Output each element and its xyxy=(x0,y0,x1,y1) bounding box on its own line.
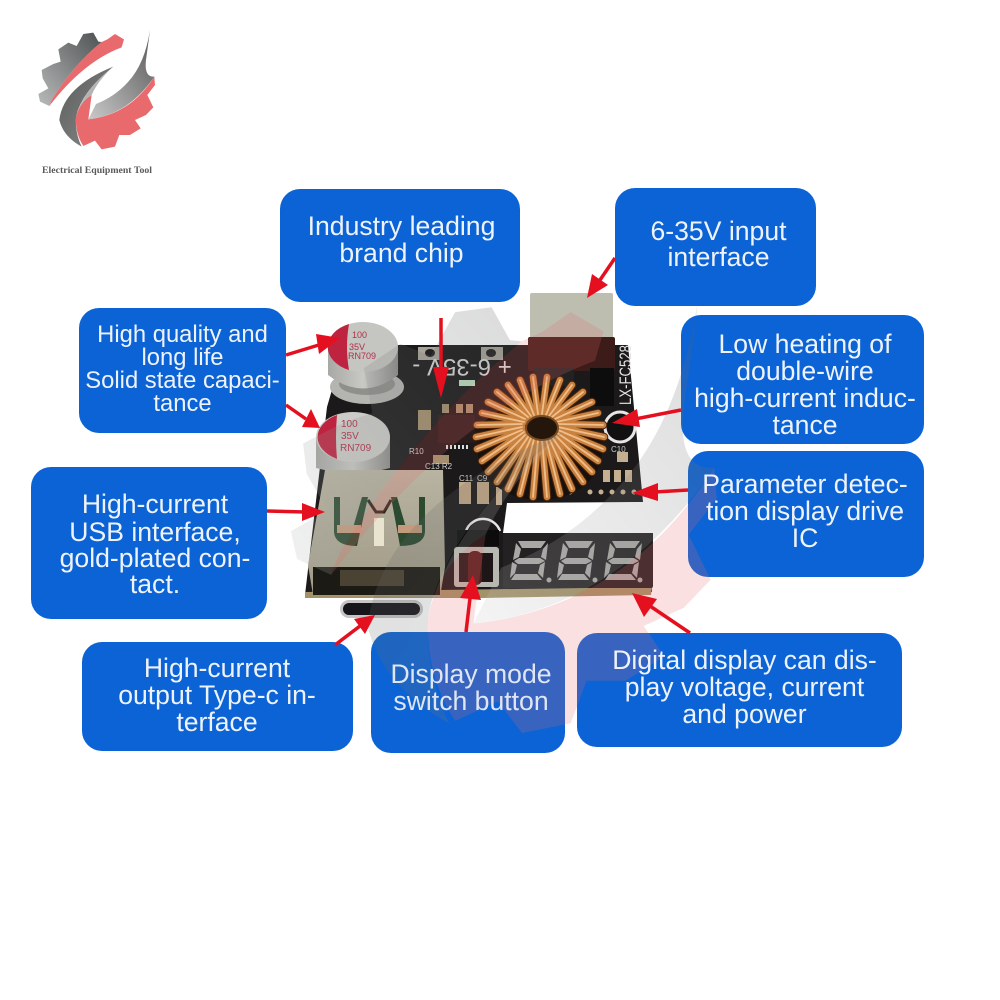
callout: usb interface: USB interface, xyxy=(69,517,241,547)
callout: display mode button: switch button xyxy=(393,686,549,716)
callout: digital display: play voltage, current xyxy=(625,672,865,702)
callout: input interface: interface xyxy=(668,242,770,272)
logo wordmark: Electrical Equipment Tool xyxy=(42,166,152,176)
arrows xyxy=(267,258,690,645)
arrow to display xyxy=(632,593,690,633)
callout: digital display: Digital display can dis- xyxy=(612,645,877,675)
callout: low heating inductance: tance xyxy=(772,410,838,440)
arrow to input connector xyxy=(587,258,615,298)
arrow to driver ic xyxy=(632,483,688,501)
capacitor 1 xyxy=(328,322,404,404)
logo gear mark xyxy=(38,30,155,149)
capacitor 2: 100 xyxy=(341,419,358,430)
capacitor 1: RN709 xyxy=(348,351,376,361)
header pads xyxy=(568,490,636,494)
callout: solid state capacitance: long life xyxy=(141,344,224,371)
silkscreen component labels: C11 xyxy=(459,474,474,483)
callout: low heating inductance: high-current induc- xyxy=(694,383,916,413)
arrow to inductor xyxy=(612,409,681,427)
silkscreen component labels: C9 xyxy=(477,474,488,483)
capacitor 2 xyxy=(316,412,390,473)
arrow to chip xyxy=(433,318,449,398)
callout: low heating inductance: double-wire xyxy=(736,356,874,386)
arrow to capacitor 2 xyxy=(286,405,320,428)
arrow to button xyxy=(460,575,481,632)
callout: usb interface: tact. xyxy=(130,569,180,599)
callout: parameter detection: Parameter detec- xyxy=(702,469,908,499)
callout: digital display: and power xyxy=(682,699,807,729)
digital display xyxy=(503,533,653,588)
silkscreen component labels: C10 xyxy=(611,445,626,454)
callout: type-c output: terface xyxy=(176,707,258,737)
toroid inductor xyxy=(476,377,604,500)
arrow to capacitor 1 xyxy=(286,334,340,355)
callout: type-c output: output Type-c in- xyxy=(118,680,316,710)
callout: display mode button: Display mode xyxy=(390,659,552,689)
callout: industry leading chip: brand chip xyxy=(339,238,464,268)
switch button xyxy=(454,519,500,587)
silkscreen component labels: C13 R2 xyxy=(425,462,453,471)
pcb xyxy=(305,345,653,595)
input type-c connector xyxy=(528,293,615,406)
silkscreen model label: LX-FC528 xyxy=(616,345,635,405)
pcb gold edge xyxy=(305,587,652,598)
silkscreen component labels: R10 xyxy=(409,447,424,456)
capacitor 2: 35V xyxy=(341,431,359,442)
mounting ring xyxy=(605,412,635,442)
callout: industry leading chip: Industry leading xyxy=(308,211,495,241)
callout: solid state capacitance: High quality and xyxy=(97,321,268,348)
callout: solid state capacitance: tance xyxy=(153,390,212,417)
silkscreen polarity label: + 6-35V - xyxy=(412,353,512,380)
output type-c port xyxy=(340,600,423,618)
capacitor 2: RN709 xyxy=(340,443,372,454)
smd components xyxy=(418,380,632,505)
capacitor 1: 100 xyxy=(352,330,367,340)
arrow to type-c port xyxy=(335,615,375,645)
callout: type-c output: High-current xyxy=(144,653,291,683)
callout: parameter detection: tion display drive xyxy=(706,496,904,526)
capacitor 1: 35V xyxy=(349,342,365,352)
callout: parameter detection: IC xyxy=(792,523,818,553)
product photo: converter board xyxy=(305,293,653,618)
top solder pads xyxy=(418,347,503,360)
callout: input interface: 6-35V input xyxy=(650,216,787,246)
watermark xyxy=(291,297,717,733)
callout boxes xyxy=(31,188,924,753)
silkscreen component labels xyxy=(409,445,626,483)
callout: usb interface: High-current xyxy=(82,489,229,519)
driver chip xyxy=(438,415,475,449)
callout: low heating inductance: Low heating of xyxy=(718,329,892,359)
usb connector xyxy=(308,470,445,597)
logo xyxy=(38,30,155,176)
callout: usb interface: gold-plated con- xyxy=(60,543,250,573)
callout: solid state capacitance: Solid state capaci- xyxy=(85,367,280,394)
arrow to usb xyxy=(267,503,325,521)
